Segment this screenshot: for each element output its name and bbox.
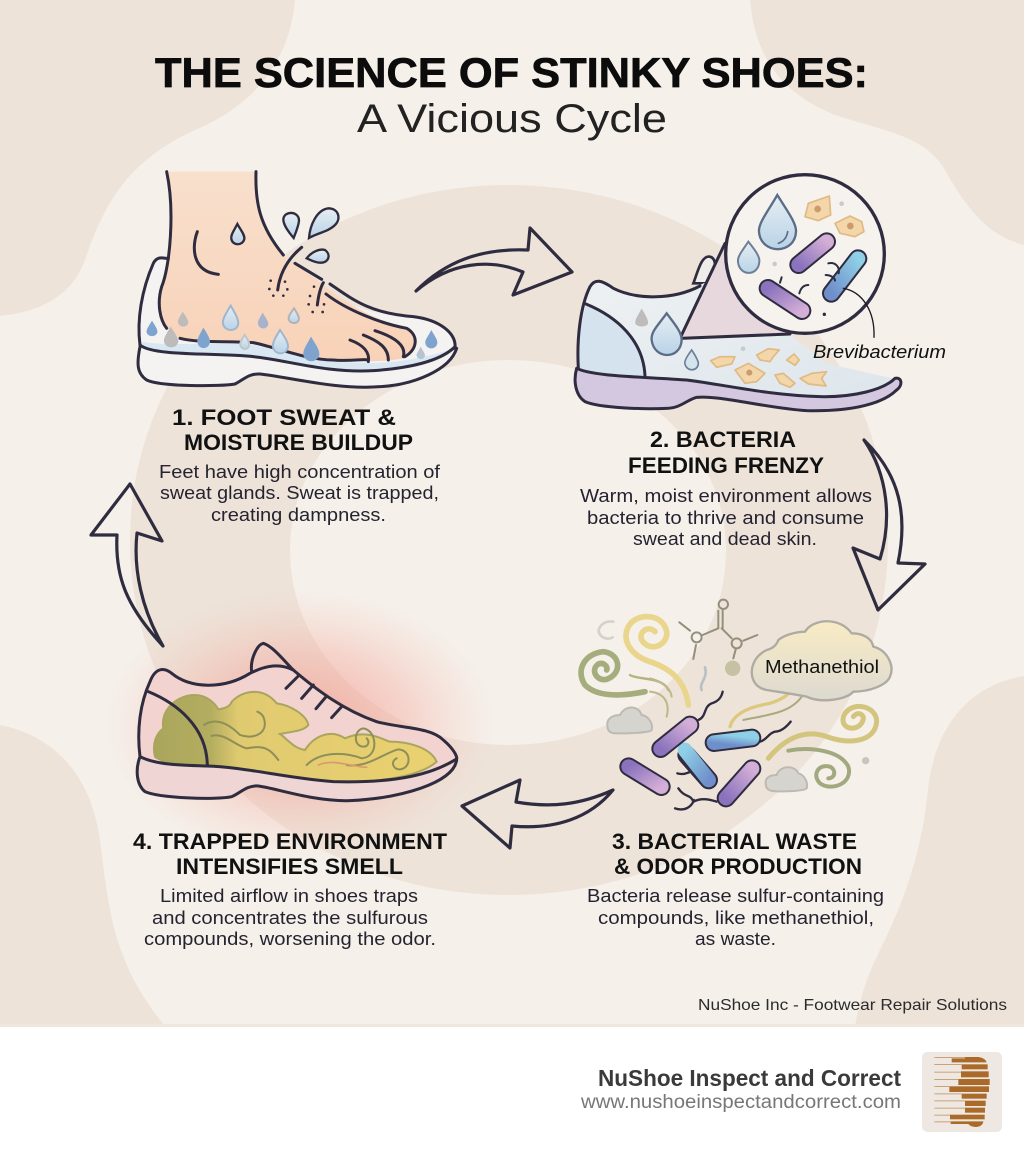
red glow: [105, 590, 495, 860]
step 2 illustration: bacteria on shoe insole: [575, 175, 901, 411]
step 2 text: sweat and dead skin.: [633, 529, 817, 549]
step 1 illustration: foot sweating in shoe: [138, 172, 457, 387]
step 4 text: Limited airflow in shoes traps: [160, 886, 418, 906]
step 3 text: as waste.: [695, 929, 776, 949]
step 1 text: Feet have high concentration of: [159, 462, 441, 482]
title: [155, 49, 868, 141]
step 4 text: compounds, worsening the odor.: [144, 929, 436, 949]
step 3 text: Bacteria release sulfur-containing: [587, 886, 884, 906]
step 4 heading: 4. TRAPPED ENVIRONMENT: [133, 829, 448, 854]
step 2 text: bacteria to thrive and consume: [587, 508, 864, 528]
arrow: step 4 to step 1: [91, 484, 163, 646]
website: www.nushoeinspectandcorrect.com: [580, 1092, 901, 1113]
step 3 illustration: bacteria and odor: [581, 600, 891, 809]
step 3 heading: 3. BACTERIAL WASTE: [612, 829, 857, 854]
step 4 heading: [133, 829, 448, 879]
step 4 text: and concentrates the sulfurous: [152, 908, 428, 928]
title: A Vicious Cycle: [357, 97, 667, 141]
step 1 text: sweat glands. Sweat is trapped,: [160, 483, 439, 503]
step 4 illustration: shoe with trapped odor: [105, 590, 495, 860]
gray clouds: [607, 707, 652, 733]
flagella: [675, 692, 791, 809]
step 3 text: [587, 886, 884, 949]
step 2 heading: 2. BACTERIA: [650, 427, 796, 452]
step 1 heading: [172, 405, 413, 455]
step 2 text: [580, 486, 872, 549]
methanethiol cloud: [752, 621, 891, 700]
step 3 text: compounds, like methanethiol,: [598, 908, 874, 928]
step 1 text: [159, 462, 441, 525]
label: Brevibacterium: Brevibacterium: [813, 342, 946, 362]
arrow: step 3 to step 4: [462, 780, 613, 848]
title: THE SCIENCE OF STINKY SHOES:: [155, 49, 868, 96]
brand name: NuShoe Inspect and Correct: [598, 1065, 901, 1091]
label: Methanethiol: Methanethiol: [765, 657, 879, 677]
step 4 heading: INTENSIFIES SMELL: [176, 854, 403, 879]
step 1 heading: 1. FOOT SWEAT &: [172, 405, 396, 430]
step 3 heading: [612, 829, 862, 879]
footer bar: [0, 1027, 1024, 1154]
molecule: [679, 600, 757, 659]
logo: [922, 1052, 1002, 1132]
credit line: NuShoe Inc - Footwear Repair Solutions: [698, 997, 1007, 1014]
step 2 heading: [628, 427, 824, 478]
odor swirls: [581, 617, 877, 787]
step 3 heading: & ODOR PRODUCTION: [614, 854, 862, 879]
step 2 heading: FEEDING FRENZY: [628, 453, 824, 478]
arrow: step 1 to step 2: [416, 228, 572, 295]
step 4 text: [144, 886, 436, 949]
step 1 heading: MOISTURE BUILDUP: [184, 430, 413, 455]
step 2 text: Warm, moist environment allows: [580, 486, 872, 506]
step 1 text: creating dampness.: [211, 505, 386, 525]
bacteria rods: [629, 725, 752, 798]
arrow: step 2 to step 3: [853, 440, 925, 610]
